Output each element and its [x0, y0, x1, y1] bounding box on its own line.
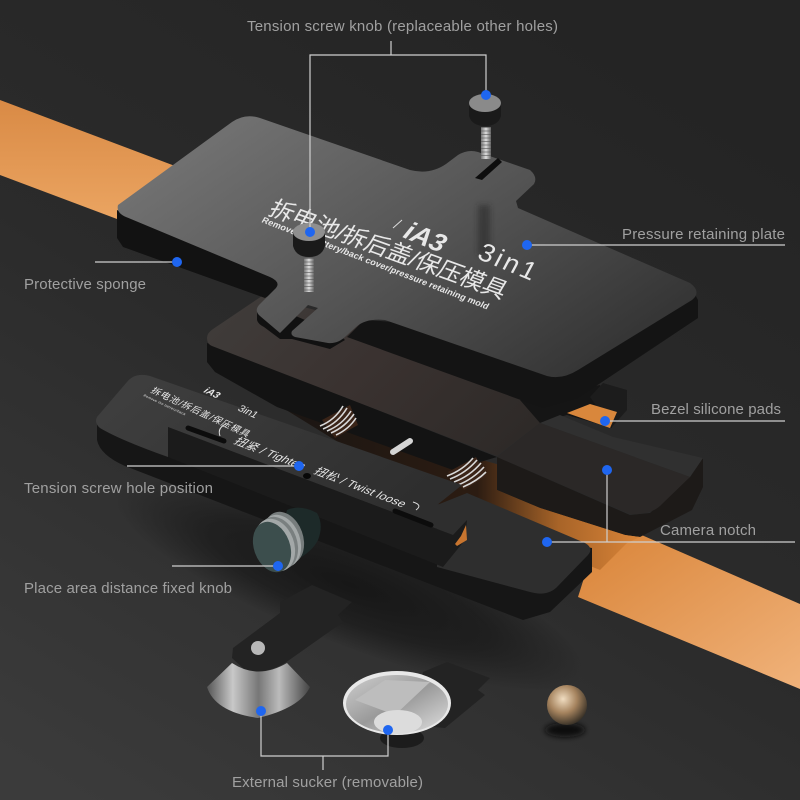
arrow: tighten	[219, 424, 226, 436]
logo 3in1 small: 3in1	[235, 404, 260, 421]
arrow: loosen	[413, 502, 419, 510]
label: external sucker	[232, 706, 423, 791]
sucker tab	[410, 662, 490, 728]
front screw shaft	[304, 258, 314, 292]
logo slash	[393, 220, 402, 228]
icon: metal ball	[545, 685, 587, 737]
plate slots	[475, 158, 502, 180]
rear screw thread	[481, 127, 491, 158]
heading: 3in1: 3in1	[473, 237, 542, 286]
icon: rear tension screw	[469, 94, 501, 159]
plate top face	[118, 116, 697, 377]
rear screw knob body	[469, 103, 501, 126]
gap behind slider with orange glow	[270, 400, 640, 570]
label: protective sponge: Protective sponge	[24, 276, 146, 293]
small Chinese name: 拆电池/拆后盖/保压模具	[149, 385, 254, 439]
panel: middle plate	[207, 296, 703, 537]
base side	[97, 420, 592, 620]
sucker cone	[207, 663, 310, 718]
icon: springs and pin	[320, 405, 486, 490]
knob cap	[246, 516, 298, 578]
orange band: left segment	[0, 100, 175, 222]
icon: right suction cup	[343, 662, 490, 748]
label: bezel silicone pads	[600, 401, 785, 426]
rear screw shaft	[481, 127, 491, 159]
text: English product name: Remove the battery/back cover/pressure retaining mold	[260, 215, 491, 311]
text: twist loose: 扭松 / Twist loose	[311, 465, 410, 510]
label: camera notch	[542, 465, 795, 547]
sucker arm	[232, 585, 352, 671]
orange strip between tray and base	[467, 490, 640, 556]
front screw thread	[304, 258, 314, 292]
plate lower side	[347, 285, 698, 408]
tray lip	[540, 415, 703, 477]
ball	[547, 685, 587, 725]
label: tension screw knob	[247, 18, 558, 237]
ball shadow	[545, 723, 585, 737]
label: protective sponge	[24, 257, 182, 293]
middle plate top face	[207, 296, 600, 456]
rear screw cap	[469, 94, 501, 112]
spring right	[447, 457, 486, 490]
sucker nut	[251, 641, 265, 655]
front screw knob body	[293, 233, 325, 257]
knob knurl front	[248, 513, 302, 577]
label: place area distance fixed knob: Place area distance fixed knob	[24, 580, 232, 597]
label: pressure retaining plate	[522, 226, 785, 250]
middle plate body side	[207, 343, 497, 470]
dark rear body	[520, 385, 612, 428]
camera notch tray side	[497, 457, 703, 537]
bezel silicone pad	[567, 404, 617, 428]
base right face	[437, 493, 590, 594]
label: tension screw hole position: Tension screw hole position	[24, 480, 213, 497]
orange pad on clamp	[455, 525, 467, 546]
cast shadow	[95, 439, 605, 731]
front screw cap	[293, 223, 325, 241]
tiny English name: Remove the battery/back	[142, 394, 187, 416]
label: place area distance fixed knob	[24, 561, 283, 597]
text: Chinese product name: 拆电池/拆后盖/保压模具	[264, 196, 513, 304]
screw hole	[303, 473, 311, 479]
text: tighten: 扭紧 / Tighten	[231, 435, 310, 472]
sucker cone inside	[346, 675, 448, 733]
clamp text group	[142, 385, 419, 510]
sucker rim	[343, 671, 451, 735]
logo iA3 small: iA3	[201, 386, 223, 401]
clamp front side	[168, 427, 467, 567]
icon: left suction cup	[207, 585, 352, 718]
label: tension screw knob: Tension screw knob (replaceable other holes)	[247, 18, 558, 35]
panel: pressure retaining plate	[117, 116, 698, 408]
heading: iA3: iA3	[399, 216, 452, 258]
panel: sliding base	[96, 375, 592, 620]
sucker stem	[380, 728, 424, 748]
label: camera notch: Camera notch	[660, 522, 756, 539]
base left face and clamp top	[96, 375, 467, 535]
label: bezel silicone pads: Bezel silicone pads	[651, 401, 781, 418]
icon: front tension screw	[293, 223, 325, 292]
label: pressure retaining plate: Pressure retaining plate	[622, 226, 785, 243]
clamp slot left	[188, 428, 224, 441]
label: tension screw hole position	[24, 461, 304, 497]
sucker base disc	[374, 710, 422, 734]
spring left	[320, 405, 358, 438]
plate tab edge	[257, 305, 345, 349]
plate left side	[117, 210, 285, 298]
rear silicone block	[590, 383, 627, 427]
label: external sucker: External sucker (removable)	[232, 774, 423, 791]
knob knurl mid	[254, 509, 308, 573]
knob knurl back	[257, 506, 311, 570]
orange band: right segment	[578, 533, 800, 689]
plate screw shadow	[478, 205, 490, 255]
icon: distance fixed knob	[246, 506, 321, 578]
plate logo text	[260, 196, 542, 311]
knob knurl ring	[251, 511, 305, 575]
knob barrel	[275, 508, 321, 560]
sucker facet	[355, 680, 430, 715]
camera notch tray face	[497, 423, 690, 514]
pin	[393, 441, 410, 452]
clamp slot right	[395, 511, 431, 525]
